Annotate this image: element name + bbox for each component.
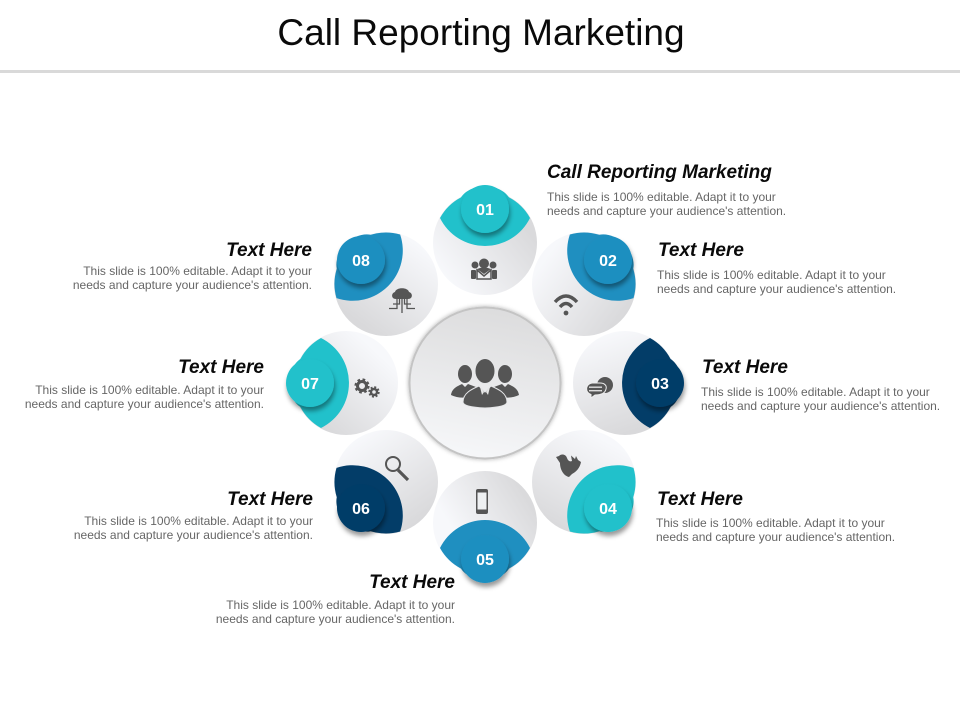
segment 02: 02	[599, 253, 617, 270]
icon: central team	[451, 358, 519, 408]
segment 07	[286, 331, 398, 435]
callout 05: Text Here	[369, 572, 455, 593]
callout 06: This slide is 100% editable. Adapt it to your	[84, 514, 313, 528]
icon: phone	[476, 489, 488, 514]
segment 01: 01	[476, 202, 494, 219]
callout 08: needs and capture your audience's attention.	[73, 278, 312, 292]
callout 01	[547, 162, 786, 218]
callout 05: needs and capture your audience's attention.	[216, 612, 455, 626]
callout 01: This slide is 100% editable. Adapt it to your	[547, 190, 776, 204]
icon: people with envelope	[471, 258, 497, 279]
central circle	[410, 308, 560, 458]
segment 08: 08	[352, 253, 370, 270]
icon: bird	[556, 454, 581, 477]
callout 05	[216, 572, 455, 626]
callout 08: Text Here	[226, 240, 312, 261]
callout 01: needs and capture your audience's attention.	[547, 204, 786, 218]
segment 05: 05	[476, 552, 494, 569]
callout 04: needs and capture your audience's attention.	[656, 530, 895, 544]
callout 02	[657, 240, 896, 296]
callout 04: Text Here	[657, 489, 743, 510]
icon: wifi	[555, 296, 577, 314]
callout 06: needs and capture your audience's attention.	[74, 528, 313, 542]
callout 08	[73, 240, 312, 292]
callout 07: This slide is 100% editable. Adapt it to your	[35, 383, 264, 397]
callout 04: This slide is 100% editable. Adapt it to your	[656, 516, 885, 530]
callout 06: Text Here	[227, 489, 313, 510]
icon: gears	[356, 380, 379, 397]
callout 03: Text Here	[702, 357, 788, 378]
segment 06	[314, 430, 438, 554]
segment 02	[532, 212, 656, 336]
segment 01	[433, 185, 537, 295]
callout 02: needs and capture your audience's attention.	[657, 282, 896, 296]
callout 03	[701, 357, 940, 413]
icon: magnifier	[386, 457, 408, 480]
callout 01: Call Reporting Marketing	[547, 162, 772, 183]
callout 05: This slide is 100% editable. Adapt it to your	[226, 598, 455, 612]
callout 07	[25, 357, 264, 411]
callout 08: This slide is 100% editable. Adapt it to your	[83, 264, 312, 278]
segment 04: 04	[599, 501, 617, 518]
callout 03: This slide is 100% editable. Adapt it to your	[701, 385, 930, 399]
callout 03: needs and capture your audience's attention.	[701, 399, 940, 413]
segment 06: 06	[352, 501, 370, 518]
segment 04	[532, 430, 656, 554]
segment 03	[573, 331, 684, 435]
segment 07: 07	[301, 376, 319, 393]
icon: cloud network	[389, 288, 415, 313]
icon: chat bubbles	[587, 377, 613, 398]
title: Call Reporting Marketing	[277, 12, 685, 53]
callout 07: Text Here	[178, 357, 264, 378]
segment 08	[314, 212, 438, 336]
segment 05	[433, 471, 537, 583]
header rule	[0, 70, 960, 73]
callout 04	[656, 489, 895, 544]
segment 03: 03	[651, 376, 669, 393]
callout 02: This slide is 100% editable. Adapt it to your	[657, 268, 886, 282]
callout 02: Text Here	[658, 240, 744, 261]
callout 07: needs and capture your audience's attention.	[25, 397, 264, 411]
callout 06	[74, 489, 313, 542]
